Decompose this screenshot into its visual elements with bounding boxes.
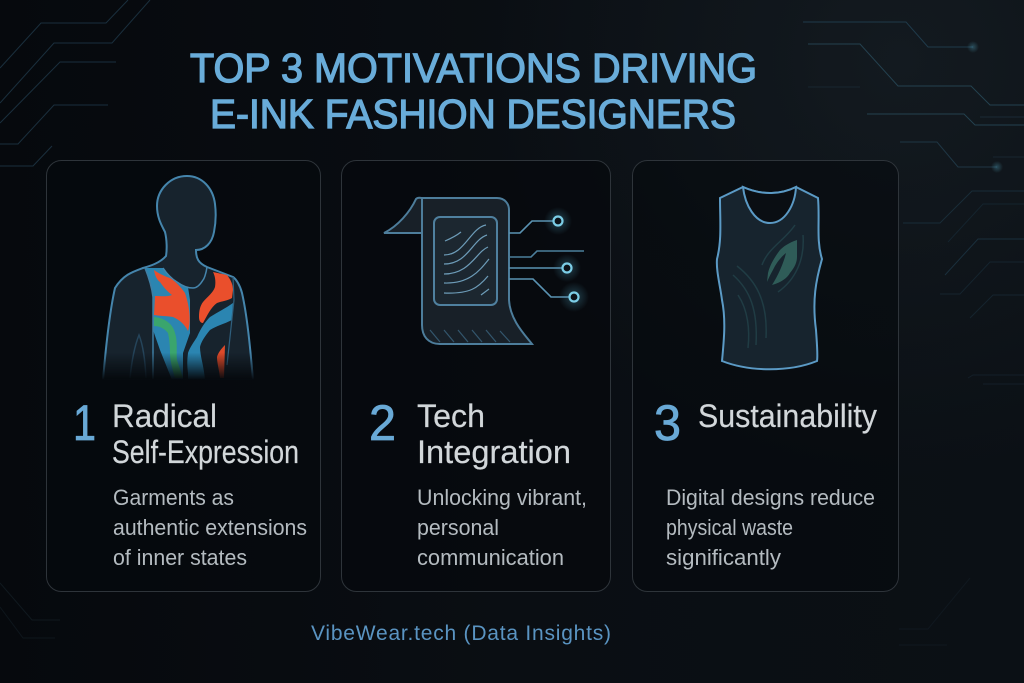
panel: radical self-expression [46, 160, 320, 592]
title [190, 45, 757, 137]
panel: sustainability [632, 160, 898, 592]
heading: radical self-expression: Self-Expression [112, 434, 299, 470]
heading: radical self-expression [112, 398, 299, 470]
garment: right blue wave [187, 303, 233, 380]
heading: tech integration [417, 398, 571, 470]
description [417, 485, 587, 570]
heading: sustainability: Sustainability [698, 398, 877, 434]
number 2: 2 [369, 395, 396, 451]
description [113, 485, 307, 570]
icon: person wearing colorful e-ink garment [103, 176, 253, 380]
source credit: VibeWear.tech (Data Insights) [311, 622, 611, 645]
description: significantly [666, 545, 781, 570]
garment: green stripe [154, 317, 183, 378]
description: authentic extensions [113, 515, 307, 540]
heading: tech integration: Tech [417, 398, 485, 434]
garment: right orange flame [199, 272, 233, 323]
icon: sleeveless digital garment with leaf [717, 187, 822, 369]
number 3: 3 [654, 395, 681, 451]
description: of inner states [113, 545, 247, 570]
garment: left blue band [145, 268, 190, 380]
panel: tech integration [342, 160, 610, 592]
heading: tech integration: Integration [417, 434, 571, 470]
description: physical waste [666, 515, 793, 540]
icon: e-ink fabric with circuit nodes [384, 198, 589, 344]
description: Digital designs reduce [666, 485, 875, 510]
title: E-INK FASHION DESIGNERS [210, 91, 736, 137]
description: personal [417, 515, 499, 540]
heading: radical self-expression: Radical [112, 398, 217, 434]
description: Unlocking vibrant, [417, 485, 587, 510]
title: TOP 3 MOTIVATIONS DRIVING [190, 45, 757, 91]
description [666, 485, 875, 570]
description: communication [417, 545, 564, 570]
description: Garments as [113, 485, 234, 510]
garment: lower orange flame [217, 345, 225, 378]
number 1: 1 [73, 395, 96, 451]
garment: left orange flame [154, 270, 190, 331]
